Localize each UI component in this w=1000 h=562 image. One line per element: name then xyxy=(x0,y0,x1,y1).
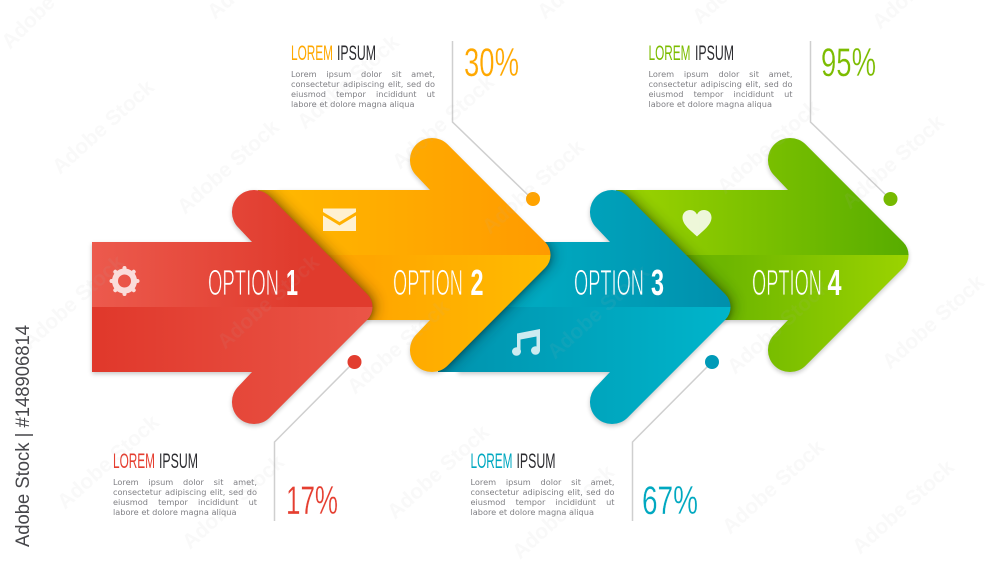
watermark pattern: Adobe Stock xyxy=(213,251,324,354)
heading: option 1 block: LOREM xyxy=(113,450,155,473)
arrow 2: orange xyxy=(258,138,552,376)
label: option 2 xyxy=(393,262,484,303)
label: option 2: 2 xyxy=(470,262,484,303)
leader line: option 4 xyxy=(810,41,888,197)
heading: option 2 block: LOREM xyxy=(291,42,333,65)
watermark pattern: Adobe Stock xyxy=(508,461,619,562)
text block: option 3: eiusmod tempor incididunt ut xyxy=(470,497,614,507)
watermark pattern: Adobe Stock xyxy=(478,136,589,239)
leader line: option 1 xyxy=(274,365,351,521)
percentage: 95%: 95% xyxy=(821,41,876,85)
text block: option 4: consectetur adipiscing elit, sed do xyxy=(648,79,792,89)
text block: option 2 xyxy=(291,69,435,109)
watermark pattern: Adobe Stock xyxy=(723,276,834,379)
text block: option 3: labore et dolore magna aliqua xyxy=(470,507,594,517)
text block: option 1: eiusmod tempor incididunt ut xyxy=(113,497,257,507)
label: option 4: OPTION xyxy=(752,262,822,303)
watermark pattern: Adobe Stock xyxy=(848,456,959,559)
icon: envelope xyxy=(323,208,356,231)
label: option 4: 4 xyxy=(828,262,842,303)
label: option 1: OPTION xyxy=(208,262,279,303)
watermark pattern: Adobe Stock xyxy=(713,96,824,199)
label: option 1 xyxy=(208,262,298,303)
text block: option 2: Lorem ipsum dolor sit amet, xyxy=(291,69,435,79)
text block: option 1: labore et dolore magna aliqua xyxy=(113,507,236,517)
label: option 3: 3 xyxy=(651,262,664,303)
text block: option 1 xyxy=(113,477,257,517)
text block: option 1: Lorem ipsum dolor sit amet, xyxy=(113,477,257,487)
arrow 4: green xyxy=(616,138,910,376)
watermark pattern: Adobe Stock xyxy=(543,261,654,364)
icon: gear xyxy=(112,268,138,294)
text block: option 2: eiusmod tempor incididunt ut xyxy=(291,89,435,99)
watermark pattern: Adobe Stock xyxy=(178,451,289,554)
icon: heart xyxy=(682,210,712,236)
dot: option 1 xyxy=(348,355,362,369)
watermark pattern: Adobe Stock xyxy=(293,31,404,134)
dot: option 2 xyxy=(526,192,540,206)
label: option 3: OPTION xyxy=(574,262,644,303)
heading: option 2 block: IPSUM xyxy=(337,42,376,65)
icon: music note xyxy=(512,329,540,356)
text block: option 1: consectetur adipiscing elit, sed do xyxy=(113,487,257,497)
dot: option 4 xyxy=(884,192,898,206)
label: option 1: 1 xyxy=(286,262,298,303)
dot: option 3 xyxy=(705,355,719,369)
arrow 1: red xyxy=(85,180,380,432)
percentage: 67%: 67% xyxy=(642,479,698,523)
watermark pattern: Adobe Stock xyxy=(383,421,494,524)
leader line: option 2 xyxy=(452,41,530,197)
text block: option 4: Lorem ipsum dolor sit amet, xyxy=(648,69,792,79)
watermark pattern: Adobe Stock xyxy=(48,76,159,179)
heading: option 4 block: LOREM xyxy=(648,42,690,65)
text block: option 4: labore et dolore magna aliqua xyxy=(648,99,772,109)
watermark pattern: Adobe Stock xyxy=(173,116,284,219)
text block: option 2: consectetur adipiscing elit, sed do xyxy=(291,79,435,89)
text block: option 3: Lorem ipsum dolor sit amet, xyxy=(470,477,614,487)
percentage: 17%: 17% xyxy=(286,479,338,523)
heading: option 4 block: IPSUM xyxy=(695,42,734,65)
percentage: 30%: 30% xyxy=(464,41,519,85)
stock credit: Adobe Stock | #148906814 xyxy=(13,325,34,547)
heading: option 3 block: LOREM xyxy=(470,450,512,473)
watermark pattern: Adobe Stock xyxy=(388,71,499,174)
text block: option 4 xyxy=(648,69,792,109)
watermark pattern: Adobe Stock xyxy=(18,251,129,354)
watermark pattern: Adobe Stock xyxy=(343,296,454,399)
watermark pattern: Adobe Stock xyxy=(838,111,949,214)
label: option 3 xyxy=(574,262,664,303)
arrow 3: teal xyxy=(438,190,732,428)
watermark pattern: Adobe Stock xyxy=(718,436,829,539)
watermark pattern: Adobe Stock xyxy=(878,271,989,374)
heading: option 1 block: IPSUM xyxy=(159,450,198,473)
text block: option 3 xyxy=(470,477,614,517)
text block: option 3: consectetur adipiscing elit, sed do xyxy=(470,487,614,497)
watermark pattern: Adobe Stock xyxy=(53,411,164,514)
leader line: option 3 xyxy=(632,365,709,521)
text block: option 2: labore et dolore magna aliqua xyxy=(291,99,414,109)
text block: option 4: eiusmod tempor incididunt ut xyxy=(648,89,792,99)
heading: option 3 block: IPSUM xyxy=(516,450,556,473)
label: option 2: OPTION xyxy=(393,262,463,303)
label: option 4 xyxy=(752,262,842,303)
